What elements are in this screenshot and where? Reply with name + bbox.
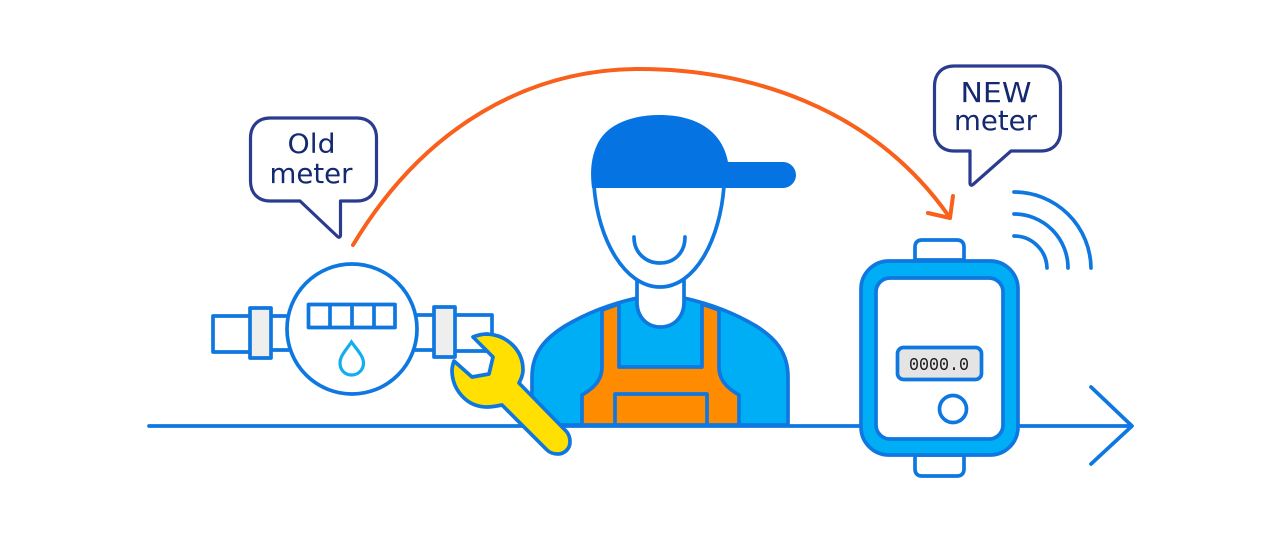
old water meter [213,264,492,394]
meter dial [287,264,417,394]
meter counter [308,304,395,328]
new smart meter [861,240,1018,476]
worker overalls [582,304,739,425]
worker smile [634,237,685,263]
icon: wrench [452,334,570,454]
worker torso [532,298,788,425]
worker face [594,186,724,287]
meter button [940,396,966,422]
callout: old meter [250,118,376,237]
worker neck [637,280,684,327]
digital display: 0000.0 [909,356,969,376]
digital display [898,348,982,380]
callout: old meter: meter [270,157,353,190]
right pipe [412,307,492,357]
worker [532,115,796,425]
icon: wireless signal [1014,192,1091,268]
callout: new meter: NEW [960,77,1032,109]
meter face [876,278,1003,439]
left pipe [213,308,292,358]
callout: old meter: Old [288,129,336,160]
meter casing [861,261,1018,455]
icon: water drop [340,342,364,375]
bottom tab [915,455,964,476]
worker cap [591,115,796,188]
arrow: replacement arc [353,69,953,245]
callout: new meter [934,66,1060,185]
top tab [915,240,964,260]
callout: new meter: meter [954,104,1037,137]
arrow: timeline axis [149,387,1132,464]
